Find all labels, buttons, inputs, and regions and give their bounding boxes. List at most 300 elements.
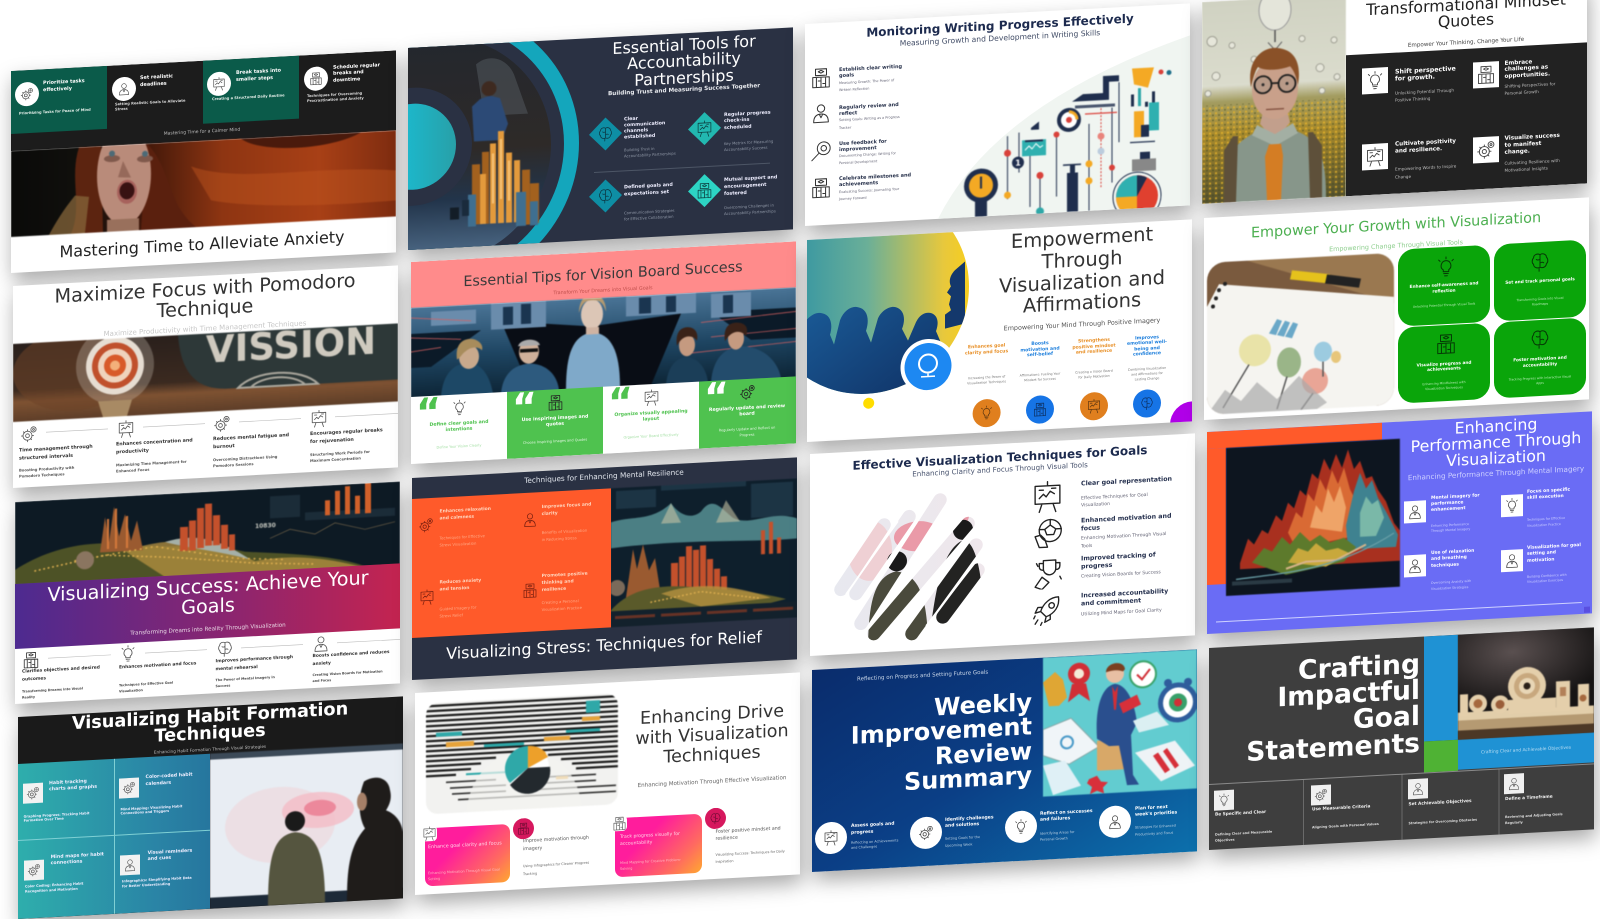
item 1 text: Building Trust in	[624, 146, 654, 152]
card 2 title	[620, 830, 680, 849]
quote mark 2: “	[512, 384, 537, 430]
item 1: Time management through	[19, 445, 93, 454]
item 3	[624, 182, 673, 197]
item 3: Improves performance through	[216, 655, 293, 664]
item 2: Regularly review and	[839, 101, 899, 111]
icon: steps	[207, 71, 231, 96]
item 2 text: Upcoming Week	[945, 842, 972, 848]
item 4	[148, 848, 192, 864]
item 2: and solutions	[945, 822, 979, 829]
item 3 text: for Effective Collaboration	[624, 213, 674, 221]
caption: Reflecting on Progress and Setting Future Goals	[857, 670, 988, 683]
icon: bulb	[119, 644, 137, 663]
item 2: quotes	[546, 422, 564, 428]
tile 4 title: Foster motivation and	[1513, 356, 1567, 363]
item 1 text: Unlocking Potential Through	[1394, 88, 1454, 96]
tile 1 title: effectively	[43, 86, 72, 93]
icon: books and medal	[812, 178, 830, 198]
item 2	[1081, 513, 1172, 534]
icon: diamond 4	[688, 174, 721, 207]
caption: Crafting Clear and Achievable Objectives	[1481, 746, 1571, 755]
item 4 text: Infographics: Simplifying Habit Data	[122, 875, 192, 883]
item 1: for growth.	[1394, 74, 1435, 83]
column 1 text	[967, 374, 1006, 386]
card 2 text: Solving	[620, 866, 632, 871]
column 2 text	[1020, 371, 1060, 383]
item 3 text: The Power of Mental Imagery in	[216, 675, 275, 682]
column 4 text: Combining Visualization	[1128, 365, 1166, 371]
item 3	[213, 432, 289, 452]
title: Affirmations	[1023, 289, 1141, 318]
green tile 4	[1494, 318, 1586, 398]
title: Empowerment	[1011, 222, 1153, 253]
item 4	[310, 427, 383, 447]
card 1 text: Setting	[428, 876, 440, 881]
tile 3 title: achievements	[1427, 366, 1461, 373]
item 2: Regular progress	[724, 110, 771, 118]
item 4: Plan for next	[1135, 805, 1168, 812]
title: Essential Tools for	[612, 31, 756, 58]
item 3	[1040, 809, 1093, 824]
item 2: scheduled	[724, 125, 752, 131]
item 1 text	[851, 838, 898, 852]
item 3 text	[216, 675, 275, 689]
column 2: Boosts	[1031, 341, 1049, 347]
column 2: Use Measurable Criteria	[1312, 804, 1370, 812]
item 3 text: Change	[1394, 174, 1411, 180]
item 2: Identify challenges	[945, 815, 994, 822]
item 4 text: and Focus	[312, 678, 331, 683]
subtitle: Transforming Dreams into Reality Through Visualization	[130, 622, 286, 636]
notch with icon 1	[422, 826, 437, 842]
notch with icon 2	[612, 816, 627, 831]
card 2 text	[620, 856, 681, 872]
icon: books	[1435, 331, 1457, 357]
tile 1 background	[411, 392, 507, 464]
item 1 text: Techniques for Effective	[440, 533, 485, 541]
item 2: reflect	[839, 110, 857, 117]
item 1: outcomes	[22, 677, 46, 683]
column 1: clarity and focus	[965, 349, 1008, 356]
item 1: goals	[839, 72, 854, 79]
item 4: motivation	[1527, 557, 1554, 564]
item 1 text: and Challenges	[851, 845, 877, 850]
panel: Essential Tips for Vision Board Success	[411, 241, 796, 464]
tile 1 title	[1410, 281, 1478, 297]
item 4 text	[310, 448, 370, 464]
green square	[1424, 740, 1458, 773]
title	[635, 701, 789, 769]
item 3 text: Overcoming Anxiety with	[1431, 578, 1471, 585]
item 4 text: Creating a Personal	[542, 598, 579, 605]
item 2: Embrace	[1504, 59, 1532, 66]
item 2: Use inspiring images and	[522, 415, 588, 423]
item 2 text: Shifting Perspectives for	[1504, 81, 1555, 89]
item 1	[1394, 65, 1456, 83]
icon: bulb	[1435, 254, 1457, 280]
tile 4 text	[307, 91, 364, 103]
item 4: Boosts confidence and reduces	[312, 649, 389, 659]
blue column	[1424, 635, 1458, 742]
item 2 text	[542, 526, 587, 543]
green tile 3	[1398, 323, 1490, 404]
connector lines	[15, 631, 400, 672]
item 4: Visual reminders	[148, 848, 192, 856]
icon tile 4	[1504, 773, 1524, 794]
title: Impactful	[1277, 675, 1420, 713]
column 3: positive mindset	[1072, 343, 1116, 350]
item 2 text	[119, 681, 173, 694]
tile 4 title: downtime	[333, 76, 360, 84]
tile 2 text: Roadmaps	[1532, 302, 1548, 306]
item 4: Promotes positive	[542, 572, 588, 579]
item 1 text	[1394, 88, 1454, 103]
column 4: Improves	[1135, 335, 1159, 341]
orange panel	[412, 488, 611, 638]
item 1 text: Enhancing Performance	[1431, 522, 1469, 528]
item 3	[216, 654, 293, 674]
title: with Visualization	[635, 721, 789, 749]
item 1: structured intervals	[19, 454, 73, 461]
item 3 text	[213, 453, 277, 469]
icon: trophy	[1031, 555, 1064, 590]
photo: men viewing screen	[210, 743, 403, 909]
item 1 text: Boosting Productivity with	[19, 466, 74, 473]
item 2	[1504, 59, 1550, 79]
panel: Transformational Mindset Quotes	[1202, 0, 1586, 204]
tile 4 text	[1509, 374, 1571, 388]
tile 1 text: Unlocking Potential Through Visual Tools	[1413, 302, 1475, 309]
panel: Enhancing Performance Through Visualization	[1207, 411, 1592, 634]
title	[55, 271, 355, 326]
item 1: Establish clear writing	[839, 63, 902, 73]
column 3 text: Creating a Vision Board	[1075, 368, 1113, 374]
tile 2 title: deadlines	[140, 80, 167, 88]
tile 3 text	[1422, 380, 1466, 391]
column 1: Enhances goal	[968, 343, 1005, 350]
photo: wooden targets	[1458, 627, 1594, 740]
item 2: check-ins	[724, 118, 749, 124]
item 3: Cultivate positivity	[1394, 138, 1456, 148]
icon tile 2	[1311, 784, 1331, 805]
item 4 text: Accountability Partnerships	[724, 208, 776, 216]
column 4 title: Foster positive mindset and	[716, 826, 781, 835]
icon: books	[812, 68, 830, 88]
item 3: techniques	[1431, 562, 1459, 569]
illustration: flat instruments chart	[938, 36, 1190, 218]
item 4 text: Journey Forward	[839, 196, 867, 201]
icon: gears in head	[1472, 136, 1498, 164]
tile 1 title	[43, 78, 85, 93]
column 1: Be Specific and Clear	[1215, 810, 1266, 818]
item 4: for rejuvenation	[310, 438, 354, 445]
tile 2 text: Stress	[115, 107, 128, 111]
column 2 title: Improve motivation through	[523, 836, 589, 844]
item 1	[851, 821, 894, 837]
item 4 text: Evaluating Success: Journaling Your	[839, 187, 899, 194]
tile 4 title: breaks and	[333, 69, 364, 77]
item 1: established	[624, 134, 655, 140]
title: Weekly	[934, 688, 1032, 721]
title: Essential Tips for Vision Board Success	[463, 259, 743, 290]
item 3	[1431, 548, 1474, 570]
item 2 text: Enhancing Motivation Through Visual	[1081, 531, 1166, 541]
column 4 title: resilience	[716, 836, 738, 842]
subtitle: Empowering Change Through Visual Tools	[1329, 238, 1463, 253]
item 4: thinking and	[542, 579, 574, 586]
item 4 text: Maximum Concentration	[310, 456, 361, 463]
caption: Techniques for Enhancing Mental Resilience	[524, 467, 684, 485]
item 4	[724, 174, 777, 197]
item 4 text: Cultivating Resilience with	[1504, 158, 1559, 166]
item 1 text: Reflecting on Achievements	[851, 838, 898, 844]
item 1: channels	[624, 128, 648, 134]
item 2: productivity	[116, 449, 149, 455]
item 2: calendars	[146, 781, 171, 787]
title	[1246, 651, 1420, 766]
item 3: and tension	[440, 586, 469, 593]
item 3 text: Stress Relief	[440, 612, 463, 618]
pink card 1	[425, 824, 510, 886]
green tile 3	[203, 56, 299, 124]
tile 2 text	[115, 99, 186, 111]
item 4 text: Progress	[740, 432, 754, 437]
title	[1366, 0, 1566, 31]
title: Visualization	[1446, 446, 1546, 470]
item 3: and resilience.	[1394, 146, 1442, 155]
item 2: challenges as	[1504, 64, 1548, 73]
title: Monitoring Writing Progress Effectively	[866, 11, 1134, 40]
item 4: fostered	[724, 190, 747, 197]
item 4 text	[719, 426, 775, 440]
item 3: Reduces anxiety	[440, 578, 481, 586]
title: Visualizing Stress: Techniques for Relief	[446, 627, 762, 663]
item 2 text: Setting Goals: Writing as a Progress	[839, 115, 900, 122]
pink card 2	[615, 814, 702, 877]
item 4 text: Visualization Exercises	[1527, 578, 1563, 584]
item 3: expectations set	[624, 190, 669, 197]
item 1: Mental imagery for	[1431, 493, 1480, 501]
photo in diagonal capsules	[834, 493, 985, 640]
panel: Visualizing Success: Achieve Your Goals	[15, 481, 400, 704]
tile 4 text: Techniques for Overcoming	[307, 91, 362, 98]
item 2 text: Visualization Practice	[1527, 522, 1561, 527]
item 4: Visualize success	[1504, 132, 1559, 141]
salmon header	[411, 241, 796, 308]
icon: brain	[1529, 249, 1551, 275]
tile 2 text: Transforming Goals into Visual	[1517, 296, 1563, 302]
item 3 text: Communication Strategies	[624, 207, 675, 215]
tile 3 background	[603, 382, 699, 454]
photo: 3D data landscape: 10830	[255, 522, 276, 530]
item 2 text: Accountability Success	[724, 144, 767, 152]
orange top block	[1207, 423, 1382, 449]
tile 3 title: Visualize progress and	[1416, 360, 1472, 368]
card 2 title: Track progress visually for	[620, 831, 680, 840]
tile 3 text: Enhancing Mindfulness with	[1422, 380, 1466, 386]
item 1: charts and graphs	[49, 785, 97, 793]
item 2 text: Tracker	[839, 125, 851, 130]
header band with four tiles	[11, 50, 396, 151]
subtitle: Transform Your Dreams into Visual Goals	[553, 285, 653, 296]
item 4: Visualization for goal	[1527, 543, 1581, 550]
item 3: Reflect on successes	[1040, 809, 1093, 817]
card 1 text	[428, 866, 500, 882]
item 1 text: Reality	[22, 694, 35, 699]
icon: board 2	[310, 409, 328, 428]
item 2 text: Setting Goals for the	[945, 835, 980, 841]
item 4 text	[838, 187, 900, 201]
panel: Monitoring Writing Progress Effectively	[805, 3, 1190, 226]
item 3 text: Personal Development	[839, 159, 877, 165]
tile 1 title: reflection	[1432, 289, 1456, 295]
item 4	[1504, 132, 1559, 157]
column 2	[1020, 340, 1060, 359]
item 4: board	[739, 412, 755, 418]
icon: books	[547, 394, 564, 412]
panel: Visualizing Habit Formation Techniques	[18, 696, 403, 919]
tile 4 title: Schedule regular	[333, 62, 380, 70]
photo: 3D data landscape	[611, 478, 797, 627]
item 1 text: Define Your Vision Clearly	[437, 443, 481, 450]
subtitle: Enhancing Performance Through Mental Imagery	[1408, 464, 1584, 482]
subtitle: Empower Your Thinking, Change Your Life	[1407, 37, 1524, 49]
icon: ball and hand	[1031, 517, 1064, 552]
item 4: anxiety	[312, 661, 331, 667]
page marker	[1584, 607, 1590, 613]
item 4: and cues	[148, 856, 171, 862]
column 4 text: Regularly	[1505, 820, 1523, 825]
item 2: Improves focus and	[542, 502, 591, 510]
item 1 text: Stress Visualization	[440, 541, 476, 548]
panel: Empowerment Through Visualization and Affirmations	[807, 219, 1192, 442]
title: Visualizing Habit Formation	[72, 699, 348, 734]
row top border	[1209, 763, 1594, 784]
column 4: confidence	[1133, 351, 1161, 358]
grid line horizontal	[18, 830, 210, 841]
icon circle 2	[705, 807, 726, 829]
item 1 text	[19, 465, 74, 480]
item 4 text: Strategies for Enhanced	[1135, 824, 1176, 830]
item 3: and breathing	[1431, 555, 1467, 562]
item 4: Mutual support and	[724, 175, 777, 183]
item 4	[542, 572, 588, 594]
photo: striped data chart	[426, 693, 618, 814]
title: Enhancing Drive	[640, 701, 784, 728]
icon: chart board	[1031, 479, 1064, 514]
item 1 text: Effective Techniques for Goal	[1081, 492, 1148, 501]
tile 4 title	[333, 62, 380, 84]
column 1 text: Increasing the Power of	[968, 374, 1005, 380]
item 2 text	[120, 804, 182, 817]
card 2 text: Mind Mapping for Creative Problem-	[620, 857, 681, 865]
item 1	[1431, 493, 1480, 515]
icon: diamond 3	[589, 180, 622, 212]
orange left block	[1207, 448, 1226, 585]
item 4	[709, 404, 785, 421]
item 4: Regularly update and review	[709, 404, 785, 413]
item 2: Enhances concentration and	[116, 438, 193, 447]
icon tile 3	[24, 860, 44, 881]
icon: bulb	[1361, 67, 1387, 94]
column 2 title	[523, 835, 589, 855]
item 4 text: Utilizing Mind Maps for Goal Clarity	[1081, 608, 1162, 617]
item 3 text: Guided Imagery for	[440, 605, 476, 612]
icon: bulb	[451, 399, 468, 417]
column 2: self-belief	[1027, 352, 1053, 358]
item 1	[19, 444, 93, 463]
connector lines	[13, 405, 398, 446]
footer line	[1216, 602, 1582, 622]
item 1	[839, 63, 902, 79]
quote mark 4: “	[704, 374, 729, 419]
item 3: layout	[643, 417, 659, 423]
item 2	[542, 501, 591, 518]
item 3 text	[1394, 162, 1456, 182]
item 2 text	[1081, 530, 1166, 551]
item 1 text	[440, 532, 485, 549]
icon: board	[1361, 143, 1387, 170]
item 3	[1081, 552, 1156, 572]
item 1: Define clear goals and	[430, 420, 488, 428]
icon: gears	[15, 81, 39, 106]
divider	[594, 163, 770, 173]
icon: diamond 1	[589, 118, 622, 150]
title: Empower Your Growth with Visualization	[1251, 210, 1541, 241]
tile 4 background	[699, 376, 796, 449]
item 1	[49, 778, 97, 794]
item 4: resilience	[542, 586, 566, 593]
column 4	[1127, 334, 1167, 358]
column 4: Define a Timeframe	[1505, 794, 1553, 802]
title: Enhancing	[1455, 414, 1537, 438]
title: Statements	[1246, 727, 1420, 768]
subtitle: Maximize Productivity with Time Management Techniques	[104, 319, 306, 338]
item 2 text	[945, 834, 980, 850]
item 3 text: Creating Vision Boards for Success	[1081, 570, 1161, 579]
item 3 text	[25, 881, 83, 894]
title: Visualizing Success: Achieve Your	[47, 566, 369, 606]
item 2	[945, 815, 994, 831]
icon: head	[216, 639, 234, 658]
title: Goal	[1353, 701, 1420, 736]
tile 3 text: Visualization Techniques	[1425, 385, 1463, 391]
item 1: Enhances relaxation	[440, 507, 491, 515]
card 1 text: Enhancing Motivation Through Visual Goal	[428, 867, 500, 875]
title: Review	[935, 737, 1032, 770]
item 1 text	[1081, 491, 1148, 509]
item 2	[522, 415, 588, 431]
tile 1 title: Prioritize tasks	[43, 78, 85, 86]
item 2 text	[839, 115, 900, 130]
item 1: Shift perspective	[1394, 65, 1455, 76]
item 3 text: Personal Growth	[1040, 837, 1068, 842]
item 4	[839, 172, 911, 188]
item 1: Assess goals and	[851, 822, 894, 829]
title	[612, 31, 756, 89]
icon circle 3	[1004, 810, 1036, 844]
subtitle: Building Trust and Measuring Success Together	[608, 83, 760, 97]
item 2 text	[116, 458, 187, 475]
item 2: Color-coded habit	[146, 773, 192, 780]
title: Techniques	[154, 721, 266, 747]
item 1 text: Written Reflection	[839, 87, 869, 92]
item 3 text: Color Coding: Enhancing Habit	[25, 881, 83, 888]
item 3 text: Pomodoro Sessions	[213, 462, 254, 468]
column 4 text: Visualizing Success: Techniques for Daily	[716, 849, 785, 857]
item 2 text	[724, 138, 773, 152]
item 3: Use of relaxation	[1431, 548, 1474, 556]
